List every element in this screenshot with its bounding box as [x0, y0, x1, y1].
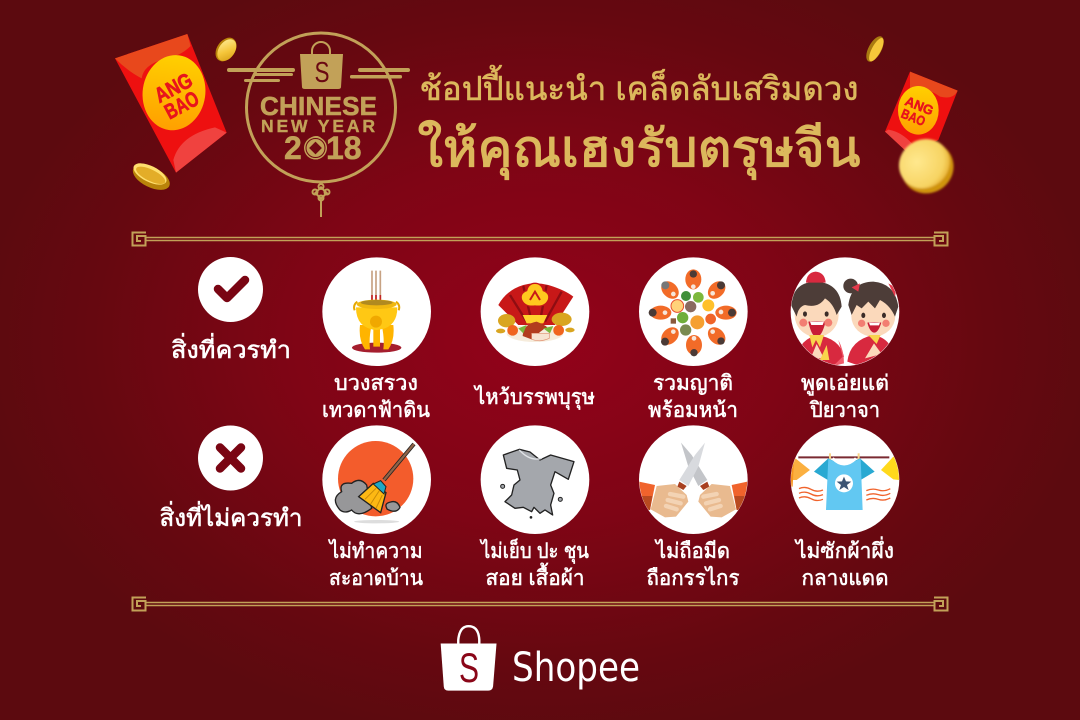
- label: ไหว้บรรพบุรุษ: [473, 385, 595, 410]
- label: ไม่ซักผ้าผึ่ง: [794, 536, 894, 563]
- label: ถือกรรไกร: [646, 566, 740, 590]
- cloud lines: [227, 68, 410, 82]
- icon: ancestor offerings: [481, 257, 589, 366]
- icon: laundry in sun: [790, 425, 899, 534]
- shopee bag in logo: [300, 42, 343, 89]
- right red envelope: [885, 72, 958, 153]
- coin: blurred large: [889, 129, 964, 204]
- left red envelope: ANG: [150, 68, 196, 108]
- right red envelope: ANG: [903, 93, 936, 118]
- icon: family dinner: [639, 257, 748, 366]
- left red envelope: BAO: [161, 86, 203, 124]
- icon: broom: [322, 425, 431, 534]
- label: บวงสรวง: [334, 372, 418, 395]
- shopee bag icon: S: [459, 644, 479, 691]
- chinese knot: [312, 184, 330, 217]
- shopee wordmark: Shopee: [512, 645, 640, 691]
- icon: cross: [198, 426, 263, 490]
- label: ปิยวาจา: [809, 399, 880, 422]
- icon: children greeting: [791, 257, 899, 366]
- Shopee logo: [441, 626, 640, 691]
- shopee bag in logo: S: [314, 57, 330, 89]
- logo: Chinese New Year 2018: [227, 33, 410, 217]
- coin: upper left: [211, 34, 241, 65]
- coin in year: [304, 136, 327, 160]
- coin: upper right: [863, 34, 887, 64]
- panel: don't: [160, 425, 899, 590]
- divider top: [132, 232, 948, 246]
- coin: lower left: [129, 159, 174, 195]
- panel: do: [171, 257, 899, 422]
- label: รวมญาติ: [653, 372, 733, 395]
- label: ไม่ทำความ: [328, 539, 422, 563]
- label: กลางแดด: [802, 567, 888, 590]
- label: เทวดาฟ้าดิน: [322, 399, 430, 422]
- label: ไม่ถือมีด: [654, 539, 730, 563]
- right red envelope: BAO: [899, 106, 928, 129]
- logo text: CHINESE: [260, 91, 377, 121]
- icon: check: [198, 257, 263, 322]
- heading: don't: สิ่งที่ไม่ควรทำ: [160, 501, 302, 532]
- icon: hands with knife and scissors: [639, 425, 748, 534]
- label: ไม่เย็บ ปะ ชุน: [479, 537, 589, 564]
- heading line 2: ให้คุณเฮงรับตรุษจีน: [418, 120, 860, 180]
- logo text: NEW YEAR: [261, 116, 375, 136]
- logo year: 18: [326, 130, 362, 166]
- shopee bag icon: [441, 626, 497, 691]
- label: สะอาดบ้าน: [329, 567, 423, 590]
- divider bottom: [132, 598, 948, 610]
- heading line 1: ช้อปปี้แนะนำ เคล็ดลับเสริมดวง: [420, 65, 858, 107]
- label: พูดเอ่ยแต่: [801, 372, 889, 396]
- label: พร้อมหน้า: [648, 399, 738, 422]
- icon: incense burner: [322, 257, 431, 366]
- left red envelope: [115, 34, 227, 173]
- icon: torn shirt: [481, 425, 589, 534]
- heading: do: สิ่งที่ควรทำ: [171, 333, 291, 364]
- logo year: 2: [284, 130, 302, 166]
- logo year: 0: [307, 130, 325, 166]
- label: สอย เสื้อผ้า: [486, 563, 584, 590]
